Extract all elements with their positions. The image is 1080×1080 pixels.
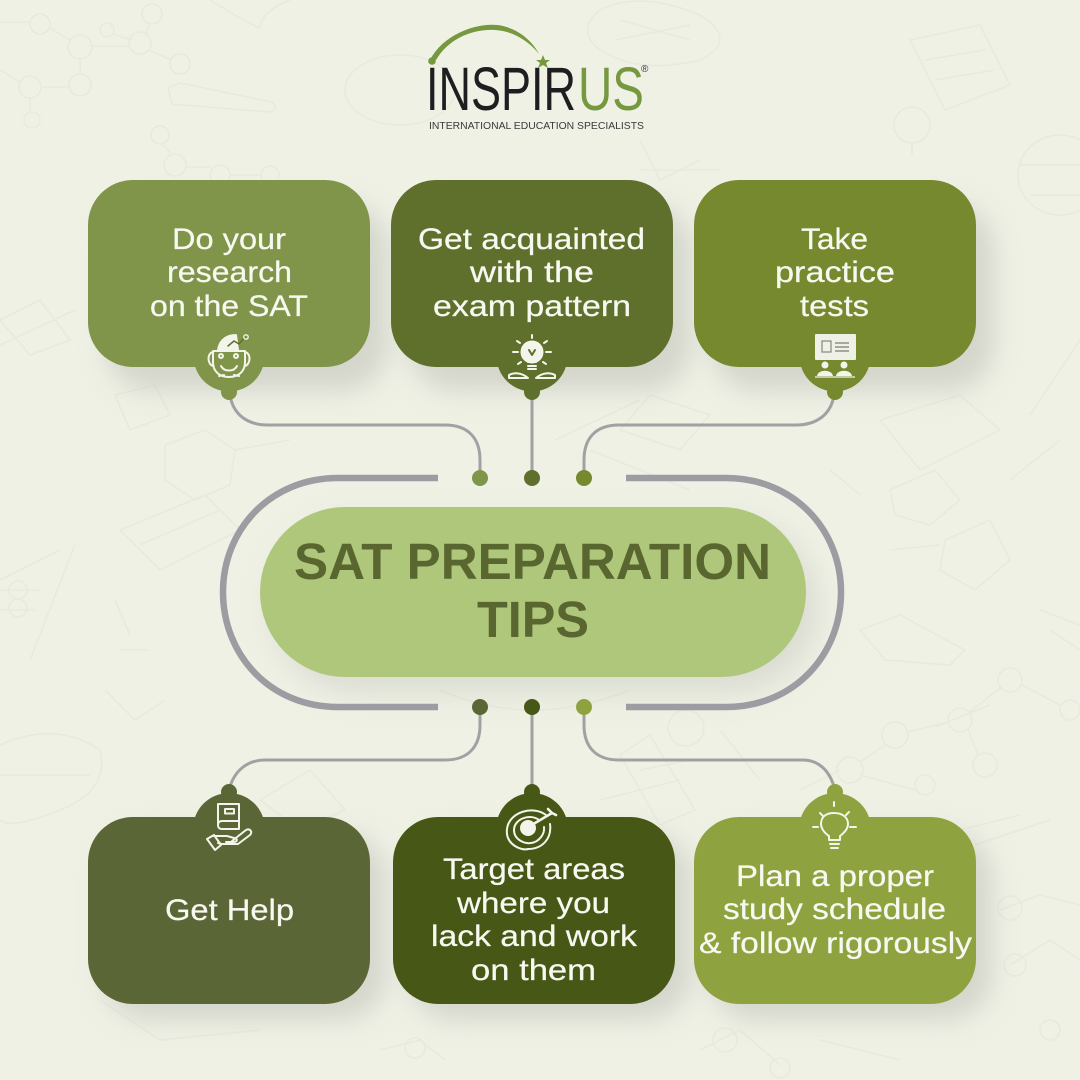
hub shape [260,507,806,677]
card shape with tab [391,180,673,400]
card text: exam pattern [433,290,631,323]
card text: research [167,256,292,289]
card shape with tab [694,180,976,400]
card text: practice [775,256,895,289]
card text: Get Help [165,894,294,927]
icon: board with two students [815,334,856,377]
connector: research to hub [230,395,480,478]
card text: Get acquainted [418,223,645,256]
card text [699,860,972,960]
left track around hub [223,478,438,707]
right track around hub [626,478,841,707]
central hub pill [260,507,806,677]
icon: head with network [208,335,250,377]
hub dots top [472,470,592,486]
panel: exam pattern [391,180,673,400]
card text: Do your [172,223,286,256]
card shape with tab [88,784,370,1004]
card text: study schedule [723,893,946,926]
hub title line 2: TIPS [477,591,589,648]
logo dot [428,57,436,65]
panel: get help [88,784,370,1004]
card shape with tab [694,784,976,1004]
icon: hand holding book [207,804,251,850]
panel: do your research [88,180,370,400]
logo wordmark US: US [578,55,644,123]
icon: target with arrow [507,809,556,849]
card text: Target areas [443,853,625,886]
logo arc [430,25,539,60]
connector: get help to hub [229,707,480,790]
card text: on them [471,954,596,987]
card shape with tab [393,784,675,1004]
registered mark: ® [641,64,649,75]
card text [150,223,308,323]
logo tagline: INTERNATIONAL EDUCATION SPECIALISTS [429,120,644,132]
card text: on the SAT [150,290,308,323]
panel: practice tests [694,180,976,400]
card text: tests [800,290,869,323]
connector: exam pattern to hub [530,395,534,478]
connector: practice tests to hub [584,395,834,478]
card text: lack and work [431,920,638,953]
panel: study schedule [694,784,976,1004]
card shape with tab [88,180,370,400]
connector: study schedule to hub [584,707,835,790]
logo: Inspirus [426,25,649,132]
card text [775,223,895,323]
icon: light bulb [813,802,856,848]
hub title line 1: SAT PREPARATION [294,533,771,590]
card text: where you [456,887,610,920]
icon: light bulb over book [509,335,555,378]
panel: target areas [393,784,675,1004]
logo star [536,55,550,68]
hub dots bottom [472,699,592,715]
card text: Plan a proper [736,860,934,893]
card text: with the [469,256,594,289]
card text: & follow rigorously [699,927,972,960]
card text [431,853,638,987]
connector: target areas to hub [530,707,534,790]
card text [418,223,645,323]
card text: Take [801,223,868,256]
logo wordmark INSPIR: INSPIR [426,55,576,123]
